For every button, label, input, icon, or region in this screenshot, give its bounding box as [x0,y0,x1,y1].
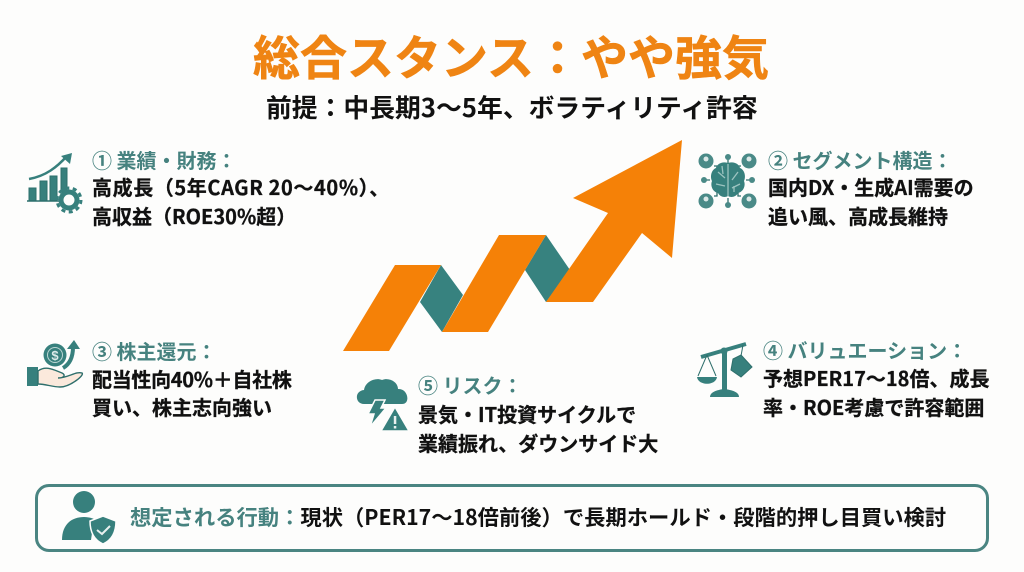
body text: 高成長（5年CAGR 20〜40%）、 [92,172,390,201]
panel: リスク [356,370,658,457]
icon: storm cloud with warning [356,379,408,430]
icon: balance scale [697,342,753,397]
body text line 2: 追い風、高成長維持 [768,201,948,230]
panel: バリュエーション [697,335,990,421]
icon: hand with coin [27,340,84,388]
icon: hand with coin: $ [51,348,59,363]
icon: brain network [698,154,756,208]
action label: 想定される行動：現状（PER17〜18倍前後）で長期ホールド・段階的押し目買い検討 [130,501,946,532]
subtitle: 前提：中長期3〜5年、ボラティリティ許容 [266,88,758,125]
heading: ③ 株主還元： [92,336,217,365]
body text: 国内DX・生成AI需要の [768,172,974,201]
heading: ⑤ リスク： [418,370,523,399]
body text: 予想PER17〜18倍、成長 [763,363,989,392]
body text: 配当性向40%＋自社株 [92,364,292,393]
panel: セグメント構造 [698,145,974,230]
body text line 2: 買い、株主志向強い [92,392,272,421]
panel: 業績・財務 [27,145,390,230]
panel: 想定される行動 [35,484,989,552]
heading: ④ バリュエーション： [763,335,967,364]
title: 総合スタンス：やや強気 [253,20,769,89]
body text: 景気・IT投資サイクルで [418,399,636,428]
body text line 2: 高収益（ROE30%超） [92,201,296,230]
body text line 2: 率・ROE考慮で許容範囲 [763,392,984,421]
heading: ① 業績・財務： [92,145,237,174]
body text line 2: 業績振れ、ダウンサイド大 [418,428,658,457]
heading: ② セグメント構造： [768,145,953,174]
icon: bar chart and gear [27,153,82,214]
panel: 株主還元 [27,336,292,421]
icon: person with shield [62,491,116,544]
